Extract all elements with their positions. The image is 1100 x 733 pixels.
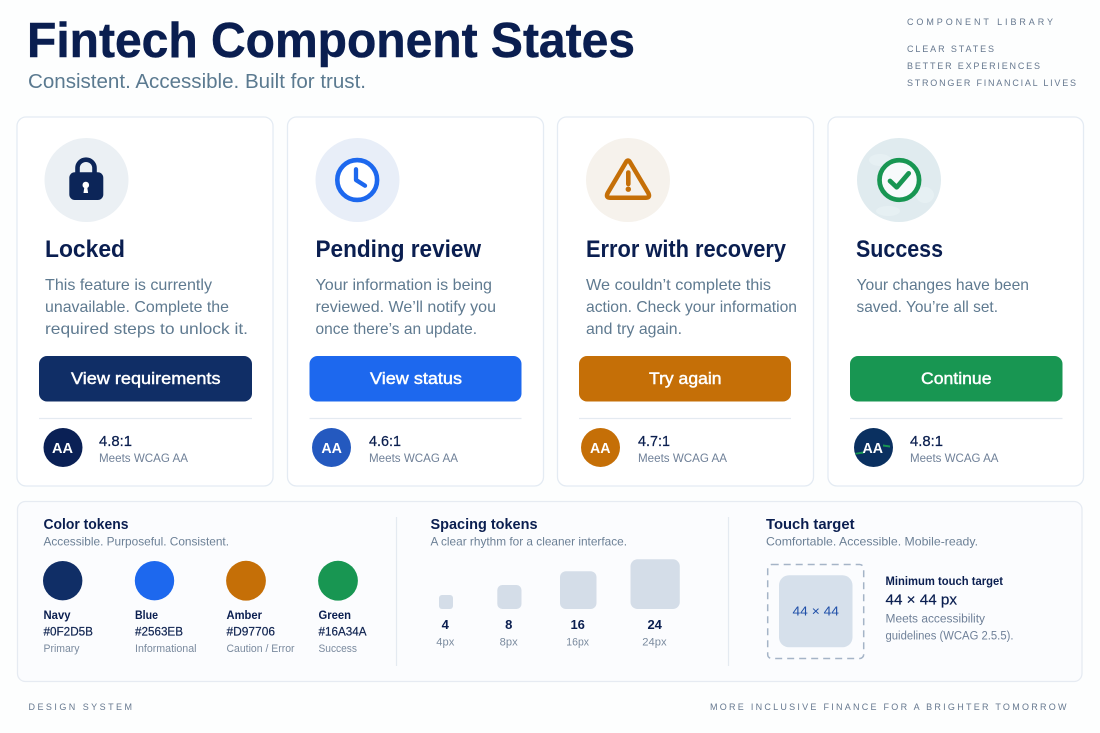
description: unavailable. Complete the: [45, 299, 229, 316]
swatch: amber: Amber: [226, 608, 262, 622]
panel: pending review: [288, 117, 544, 486]
contrast badge: Meets WCAG AA: [99, 453, 188, 465]
target details: guidelines (WCAG 2.5.5).: [886, 631, 1014, 643]
button: Continue: [921, 369, 992, 388]
button: [850, 356, 1062, 402]
color tokens: [43, 517, 366, 655]
target details: Minimum touch target: [886, 576, 1003, 588]
spacing 4: [436, 595, 455, 648]
target details: 44 × 44 px: [886, 593, 958, 609]
swatch: navy: #0F2D5B: [44, 624, 93, 638]
header notes: [907, 17, 1076, 88]
button: [310, 356, 522, 402]
color tokens: Color tokens: [44, 517, 128, 533]
button: [579, 356, 791, 402]
spacing 8: 8px: [500, 636, 518, 648]
contrast badge: AA: [321, 441, 343, 457]
swatch: navy: Navy: [44, 608, 71, 622]
description: and try again.: [586, 321, 682, 338]
description: [316, 277, 496, 338]
heading: Error with recovery: [586, 236, 787, 263]
contrast badge: 4.7:1: [638, 433, 670, 450]
touch target: [766, 517, 1014, 658]
header notes: STRONGER FINANCIAL LIVES: [907, 78, 1076, 88]
spacing 4: 4: [442, 617, 450, 632]
description: [856, 277, 1029, 316]
spacing tokens: [430, 517, 680, 648]
color tokens: Accessible. Purposeful. Consistent.: [44, 534, 229, 548]
target details: [886, 576, 1014, 643]
contrast badge: [44, 428, 188, 467]
contrast badge: 4.6:1: [369, 433, 401, 450]
swatch: amber: [226, 561, 295, 655]
contrast badge: [854, 428, 999, 467]
swatch: green: [318, 561, 366, 655]
panel: error with recovery: [558, 117, 814, 486]
swatch: green: Green: [318, 608, 351, 622]
description: action. Check your information: [586, 299, 797, 316]
button: [39, 356, 252, 402]
header notes: BETTER EXPERIENCES: [907, 61, 1040, 71]
heading: Pending review: [316, 236, 481, 263]
button: View status: [370, 369, 462, 388]
spacing 16: 16px: [566, 636, 589, 648]
contrast badge: Meets WCAG AA: [369, 453, 458, 465]
spacing 4: 4px: [436, 636, 455, 648]
contrast badge: 4.8:1: [910, 433, 943, 450]
spacing tokens: A clear rhythm for a cleaner interface.: [430, 534, 627, 548]
swatch: green: #16A34A: [318, 624, 366, 638]
swatch: amber: #D97706: [226, 624, 275, 638]
contrast badge: AA: [52, 441, 74, 457]
swatch: blue: [135, 561, 196, 655]
touch target: Comfortable. Accessible. Mobile-ready.: [766, 534, 978, 548]
header notes: CLEAR STATES: [907, 44, 994, 54]
icon: lock: [44, 138, 128, 222]
panel: locked: [17, 117, 273, 486]
spacing 24: 24px: [642, 636, 667, 648]
heading: Success: [856, 236, 943, 263]
contrast badge: [312, 428, 458, 467]
spacing 24: [630, 559, 680, 648]
description: Your information is being: [316, 277, 492, 294]
footer left: DESIGN SYSTEM: [28, 702, 132, 712]
footer right: MORE INCLUSIVE FINANCE FOR A BRIGHTER TOMORROW: [710, 702, 1067, 712]
panel: success: [828, 117, 1084, 486]
swatch: green: Success: [318, 643, 357, 655]
description: required steps to unlock it.: [45, 321, 248, 338]
swatch: blue: #2563EB: [135, 624, 183, 638]
contrast badge: Meets WCAG AA: [910, 453, 999, 465]
swatch: amber: Caution / Error: [226, 643, 295, 655]
contrast badge: [581, 428, 727, 467]
description: Your changes have been: [856, 277, 1029, 294]
spacing 16: 16: [570, 617, 585, 632]
description: [45, 277, 248, 338]
subtitle: Consistent. Accessible. Built for trust.: [28, 71, 366, 93]
swatch: navy: Primary: [44, 643, 80, 655]
target diagram: 44 × 44: [792, 604, 839, 618]
button: Try again: [649, 369, 722, 388]
spacing 8: [497, 585, 522, 648]
target details: Meets accessibility: [886, 614, 985, 626]
contrast badge: Meets WCAG AA: [638, 453, 727, 465]
panel: design tokens: [18, 502, 1082, 682]
description: This feature is currently: [45, 277, 212, 294]
swatch: blue: Informational: [135, 643, 196, 655]
description: reviewed. We’ll notify you: [316, 299, 496, 316]
spacing tokens: Spacing tokens: [430, 517, 538, 533]
contrast badge: 4.8:1: [99, 433, 132, 450]
description: We couldn’t complete this: [586, 277, 771, 294]
icon: clock: [316, 138, 400, 222]
description: saved. You’re all set.: [856, 299, 998, 316]
description: once there’s an update.: [316, 321, 477, 338]
title: Fintech Component States: [27, 14, 635, 68]
swatch: blue: Blue: [135, 608, 158, 622]
spacing 16: [560, 571, 596, 648]
target diagram: [768, 564, 864, 658]
description: [586, 277, 797, 338]
icon: warning: [586, 138, 670, 222]
heading: Locked: [45, 236, 125, 263]
icon: check: [857, 138, 941, 222]
swatch: navy: [43, 561, 93, 655]
header: [27, 14, 635, 93]
contrast badge: AA: [590, 441, 611, 457]
contrast badge: AA: [862, 441, 884, 457]
touch target: Touch target: [766, 517, 855, 533]
button: View requirements: [71, 369, 220, 388]
spacing 8: 8: [505, 617, 512, 632]
spacing 24: 24: [647, 617, 663, 632]
header notes: COMPONENT LIBRARY: [907, 17, 1053, 27]
